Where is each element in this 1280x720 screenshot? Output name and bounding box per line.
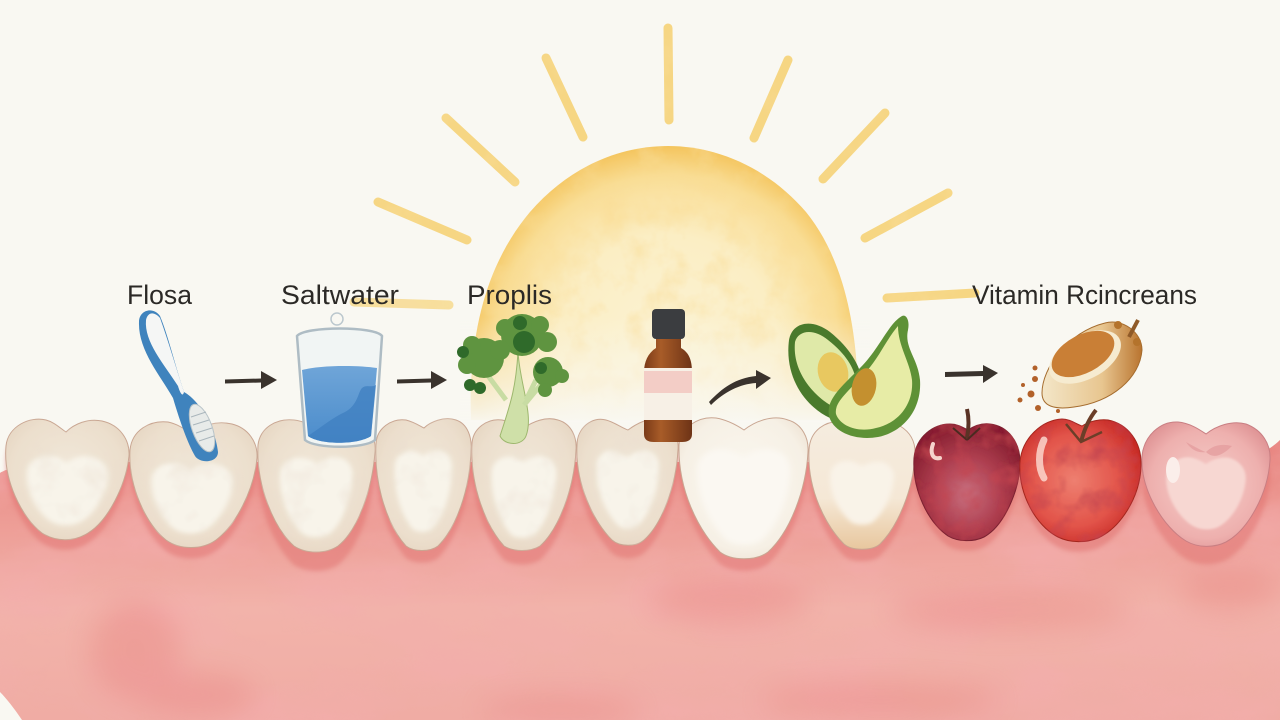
arrow: brush to glass	[225, 371, 277, 389]
arrow: avocado to seed	[945, 365, 998, 383]
icon: avocado	[788, 316, 920, 438]
label: Flosa: Flosa	[127, 280, 193, 310]
tooth 1	[6, 419, 129, 540]
tooth 2	[130, 422, 257, 548]
tooth 7	[679, 418, 808, 559]
icon: propolis bottle	[644, 309, 692, 442]
gums	[0, 429, 1280, 720]
tooth 6	[577, 419, 678, 545]
apple: bright red	[1020, 410, 1141, 542]
icon: almond pod	[1018, 319, 1142, 413]
apple: dark red	[914, 409, 1020, 541]
icon: saltwater glass	[297, 313, 382, 447]
apple: pale pink	[1142, 422, 1270, 546]
tooth 3	[258, 419, 375, 552]
sun	[460, 140, 870, 425]
label: Saltwater: Saltwater	[281, 280, 399, 310]
tooth 5	[472, 419, 576, 550]
icon: toothbrush	[139, 310, 220, 461]
label: Proplis: Proplis	[467, 280, 552, 310]
sun rays	[354, 28, 975, 305]
tooth 8	[809, 422, 915, 549]
tooth 4	[376, 419, 471, 550]
arrow: glass to herb	[397, 371, 447, 389]
gum patches	[90, 568, 1280, 720]
label: Vitamin Rcincreans: Vitamin Rcincreans	[972, 280, 1197, 310]
teeth row	[6, 418, 915, 559]
icon: parsley herb	[457, 314, 569, 444]
tooth shadows on gums	[6, 429, 1270, 571]
arrow: bottle to avocado	[709, 370, 771, 405]
